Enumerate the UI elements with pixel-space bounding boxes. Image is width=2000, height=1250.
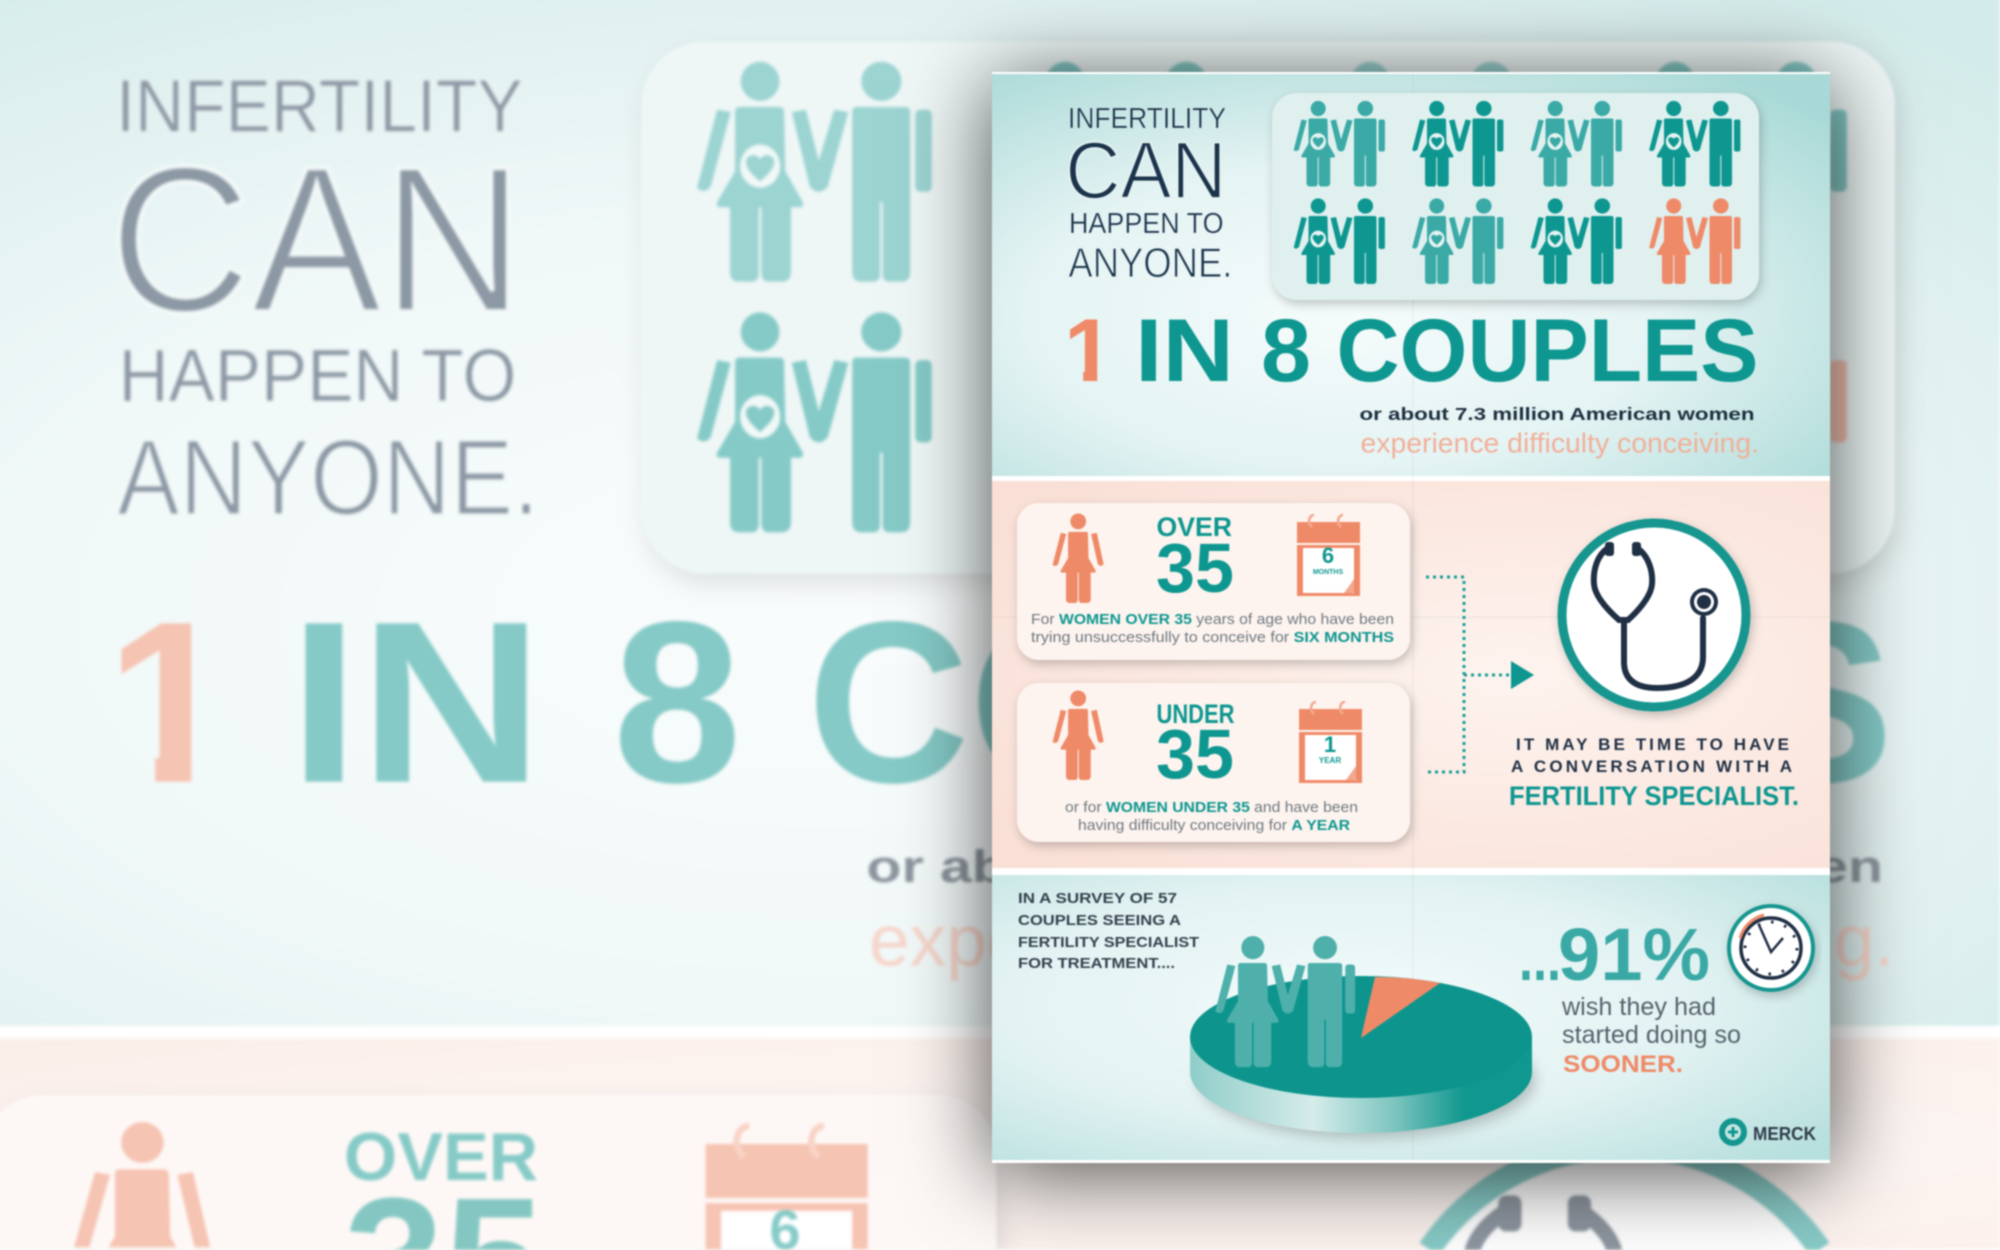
icon: stethoscope in circle	[1562, 523, 1746, 707]
icon: couple on pie	[1215, 936, 1355, 1067]
stat: under 35: UNDER	[1156, 699, 1234, 729]
panel: couples grid	[1272, 93, 1759, 300]
background: enlarged faded copy of the poster: IN	[289, 574, 543, 831]
icon: calendar 1 year	[1299, 702, 1362, 783]
background: enlarged faded copy of the poster: or about 7.3 million American women	[866, 841, 1883, 892]
title: infertility can happen to anyone: INFERTILITY	[1068, 103, 1226, 135]
text: 7.3 million American women: or about 7.3 million American women	[1360, 404, 1754, 424]
icon: clock	[1729, 906, 1813, 990]
heading: 1 in 8 couples: 1	[1064, 300, 1114, 400]
background: enlarged faded copy of the poster: OVER	[344, 1119, 538, 1195]
background: enlarged faded copy of the poster: ANYONE.	[117, 416, 539, 537]
icon: couples row one	[1294, 101, 1740, 186]
icon: calendar 6 months: 6	[1322, 543, 1334, 568]
arrow: dotted connector to specialist	[1426, 577, 1534, 772]
text: survey description	[1018, 890, 1199, 972]
text: survey description: FERTILITY SPECIALIST	[1018, 934, 1199, 951]
background: enlarged faded copy of the poster: INFERTILITY	[116, 63, 523, 147]
panel: under 35 card	[1017, 683, 1410, 842]
text: under 35 guidance: having difficulty conceiving for A YEAR	[1078, 817, 1350, 834]
logo: Merck	[1722, 1121, 1816, 1144]
heading: 1 in 8 couples	[1069, 318, 1756, 383]
text: under 35 guidance: or for WOMEN UNDER 35 and have been	[1065, 799, 1358, 816]
text: experience difficulty conceiving: experience difficulty conceiving.	[1360, 428, 1759, 458]
panel: over 35 card	[1017, 503, 1410, 660]
title: infertility can happen to anyone: ANYONE.	[1068, 239, 1232, 286]
text: survey description: COUPLES SEEING A	[1018, 912, 1181, 929]
icon: woman	[1053, 690, 1104, 780]
heading: fertility specialist: FERTILITY SPECIALIST.	[1509, 781, 1799, 811]
panel: foreground poster	[992, 72, 1830, 1163]
panel: top teal section	[992, 74, 1830, 476]
stat: 91 percent: 91%	[1558, 913, 1710, 996]
heading: 1 in 8 couples: IN	[1135, 300, 1234, 400]
stat: over 35: 35	[1156, 529, 1234, 607]
text: conversation with a specialist	[1511, 735, 1792, 776]
text: conversation with a specialist: A CONVERSATION WITH A	[1511, 757, 1792, 776]
icon: calendar 1 year: 1	[1324, 732, 1336, 757]
icon: woman	[1053, 513, 1104, 603]
icon: calendar 6 months: MONTHS	[1313, 569, 1343, 576]
stat: over 35: OVER	[1156, 512, 1232, 542]
text: over 35 guidance: For WOMEN OVER 35 years of age who have been	[1031, 611, 1394, 628]
text: wish they had started doing so: wish they had	[1561, 993, 1716, 1021]
chart: 3D pie 91 percent	[1190, 976, 1535, 1138]
text: conversation with a specialist: IT MAY BE TIME TO HAVE	[1516, 735, 1789, 754]
text: wish they had started doing so	[1561, 993, 1741, 1049]
title: infertility can happen to anyone: HAPPEN TO	[1069, 208, 1224, 240]
text: under 35 guidance	[1065, 799, 1358, 834]
stat: 91 percent: ...	[1519, 925, 1561, 994]
text: survey description: FOR TREATMENT....	[1018, 955, 1175, 972]
text: wish they had started doing so: started doing so	[1562, 1021, 1741, 1049]
icon: calendar 1 year: YEAR	[1319, 756, 1341, 765]
background: enlarged faded copy of the poster: experience difficulty conceiving.	[869, 901, 1895, 981]
background: enlarged faded copy of the poster: HAPPEN TO	[119, 333, 516, 417]
icon: couples row two with highlighted coral couple	[1294, 198, 1740, 284]
background: enlarged faded copy of the poster: CAN	[109, 123, 524, 356]
background: enlarged faded copy of the poster: COUPLES	[807, 574, 1893, 831]
background: enlarged faded copy of the poster: 8	[613, 574, 742, 831]
heading: 1 in 8 couples: COUPLES	[1336, 300, 1758, 400]
background: enlarged faded copy of the poster: 1	[106, 574, 234, 831]
text: survey description: IN A SURVEY OF 57	[1018, 890, 1177, 907]
text: over 35 guidance: trying unsuccessfully to conceive for SIX MONTHS	[1031, 629, 1394, 646]
logo: Merck: MERCK	[1753, 1124, 1816, 1144]
stat: under 35: 35	[1156, 715, 1234, 793]
title: infertility can happen to anyone	[1065, 103, 1232, 286]
text: over 35 guidance	[1031, 611, 1394, 646]
panel: bottom teal section	[992, 875, 1830, 1160]
text: sooner: SOONER.	[1563, 1051, 1683, 1078]
heading: 1 in 8 couples: 8	[1261, 300, 1311, 400]
icon: calendar 6 months	[1297, 515, 1360, 596]
title: infertility can happen to anyone: CAN	[1065, 126, 1226, 216]
panel: pink middle section	[992, 481, 1830, 868]
